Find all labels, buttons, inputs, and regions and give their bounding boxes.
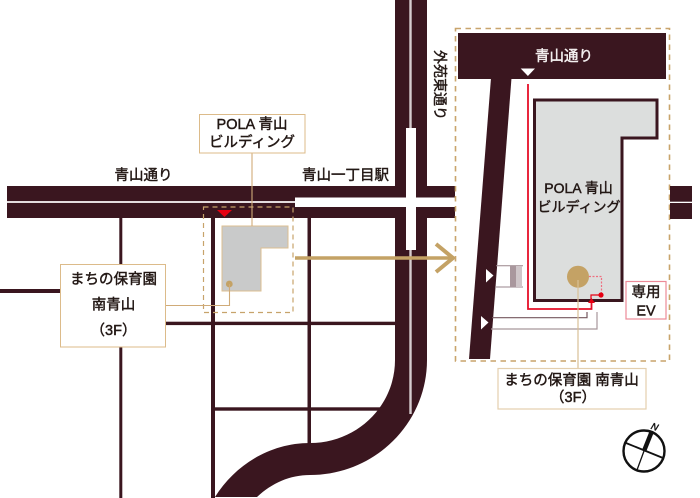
leader line: nursery (166, 284, 230, 306)
callout: POLA building: POLA 青山 (217, 116, 287, 133)
callout: nursery (60, 264, 166, 347)
callout: nursery: 南青山 (92, 296, 135, 314)
road: Aoyama-dori (7, 186, 455, 218)
area map: street network (0, 0, 455, 498)
road: side street (469, 78, 512, 359)
callout: POLA building (200, 114, 305, 153)
panel: detail map (456, 28, 692, 368)
marker: side entrance triangles (481, 269, 494, 330)
callout: nursery detail (498, 368, 646, 409)
leader line: nursery (577, 280, 579, 368)
callout: dedicated EV (626, 282, 666, 320)
building footprint (534, 100, 657, 300)
arrow: to detail map (295, 244, 453, 272)
marker: nursery (567, 266, 589, 288)
label: N: N (649, 421, 660, 434)
icon: north compass (624, 421, 664, 472)
callout: nursery: （3F） (91, 322, 136, 339)
minor streets (0, 218, 398, 498)
label: Aoyama-itchome station: 青山一丁目駅 (302, 167, 389, 184)
label: Aoyama-dori: 青山通り (114, 167, 172, 184)
parking ramp (496, 266, 523, 287)
label: building: POLA 青山 (544, 180, 613, 196)
callout: POLA building: ビルディング (209, 133, 295, 151)
marker: entrance triangle (217, 210, 232, 217)
dashed site frame (204, 207, 293, 312)
label: building (537, 180, 621, 215)
car routes (491, 312, 597, 329)
walking route: red (528, 84, 604, 309)
label: Gaien-higashi-dori: 外苑東通り (432, 50, 448, 120)
road: Gaien-higashi-dori (215, 0, 455, 497)
marker: white entrance triangle (521, 68, 535, 76)
road: Aoyama-dori top (458, 33, 666, 79)
dashed detail frame (456, 28, 670, 361)
callout: nursery detail: （3F） (550, 389, 596, 406)
panel: site locator (166, 153, 293, 312)
leader line: building (251, 153, 253, 226)
label: Aoyama-dori white: 青山通り (535, 48, 593, 65)
road stub: right (670, 186, 692, 219)
building footprint (222, 226, 288, 291)
callout: nursery: まちの保育園 (70, 271, 157, 288)
callout: dedicated EV: EV (636, 304, 656, 320)
marker: nursery dot (226, 281, 233, 287)
label: building: ビルディング (537, 199, 621, 215)
callout: nursery detail: まちの保育園 南青山 (504, 372, 639, 389)
callout: dedicated EV: 専用 (632, 284, 660, 301)
